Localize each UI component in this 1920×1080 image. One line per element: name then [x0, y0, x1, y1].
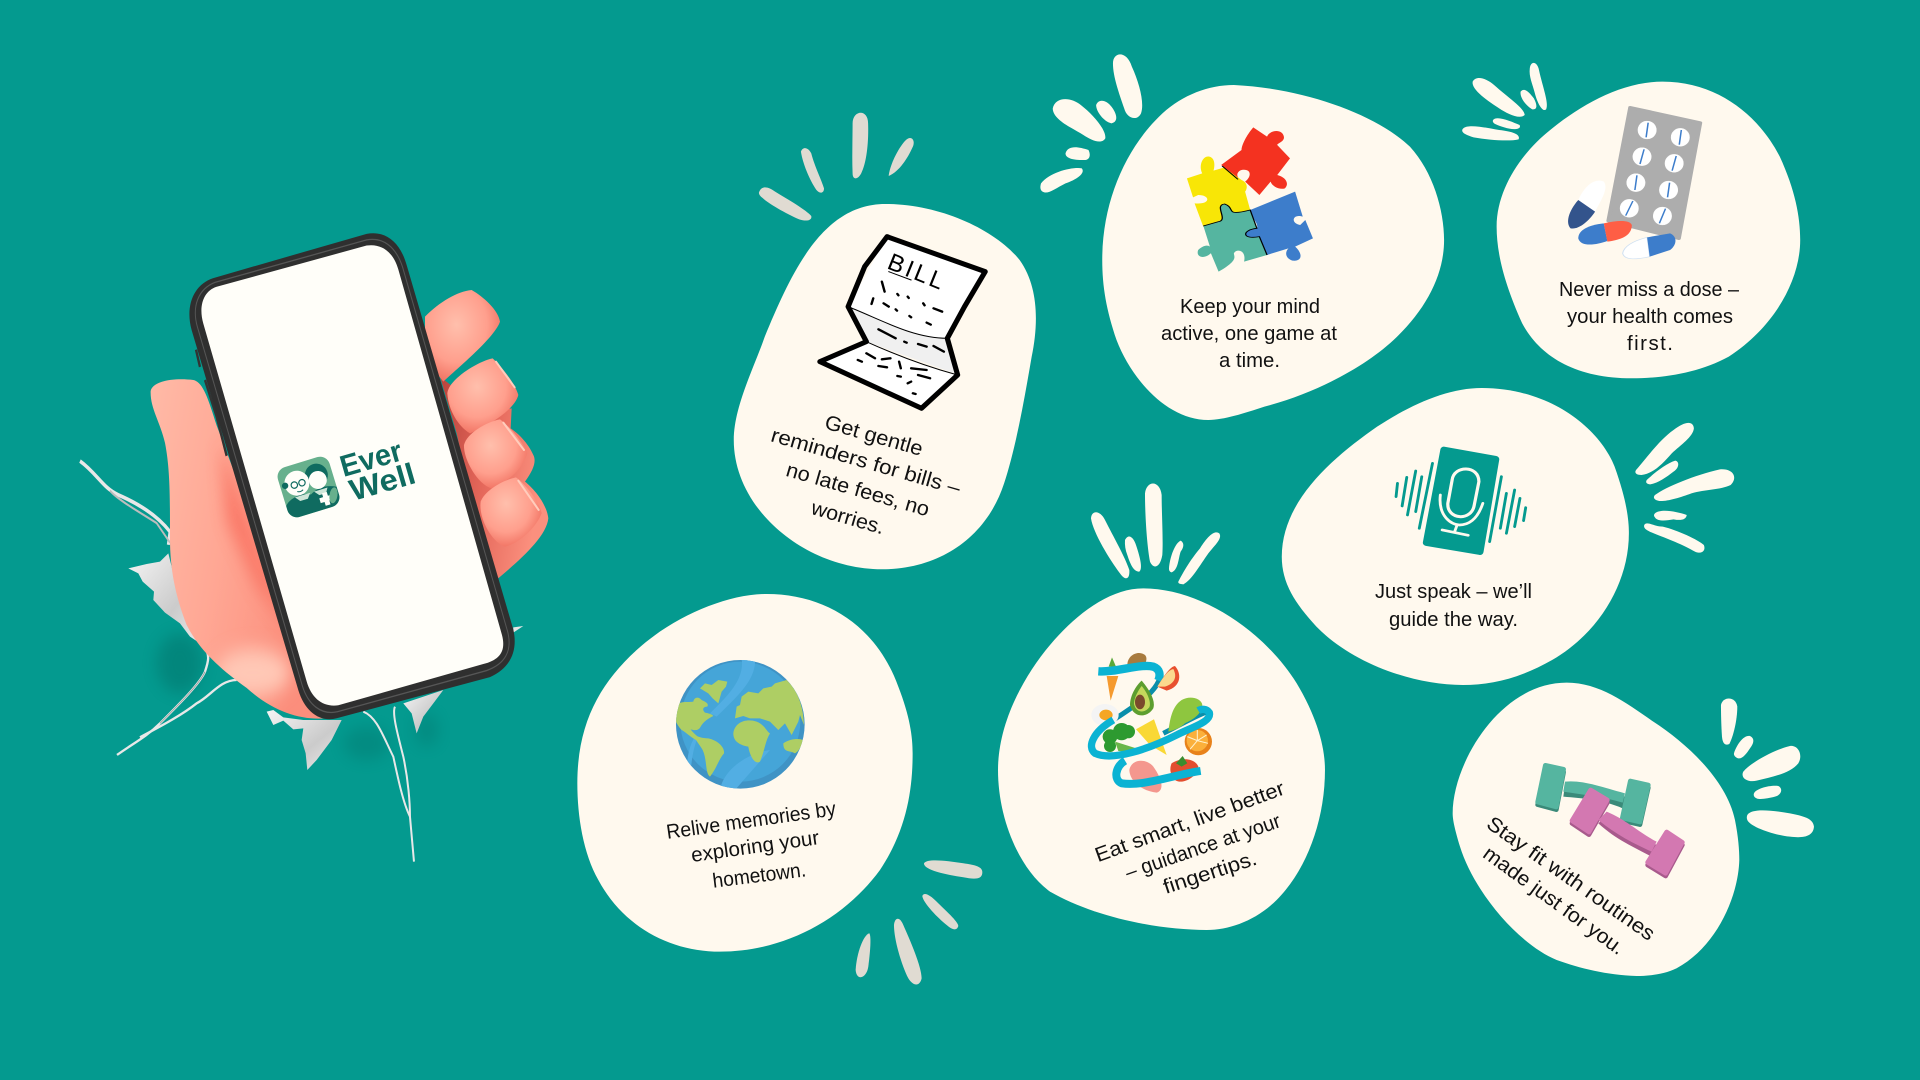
- icon: healthy food with measuring tape: [1091, 653, 1212, 793]
- logo wordmark: Ever: [336, 435, 406, 484]
- text: bills: no late fees, no: [783, 458, 932, 521]
- text: bills: Get gentle: [822, 411, 926, 461]
- rays: mind games: [1040, 54, 1142, 193]
- text: mind games: a time.: [1219, 349, 1280, 372]
- broccoli: [1103, 723, 1135, 752]
- phone in hand illustration: [80, 233, 548, 862]
- panel: bills: [734, 113, 1036, 569]
- rays: hometown memories: [856, 860, 982, 985]
- text: hometown memories: Relive memories by: [665, 797, 838, 844]
- text: voice guidance: Just speak – we’ll: [1375, 580, 1532, 603]
- text: medication: Never miss a dose –: [1559, 278, 1740, 301]
- icon: microphone: [1396, 450, 1526, 552]
- text: nutrition: Eat smart, live better: [1092, 777, 1288, 867]
- text: mind games: Keep your mind: [1180, 295, 1320, 318]
- infographic canvas: [79, 54, 1814, 984]
- panel: hometown memories: [577, 594, 982, 985]
- icon: bill paper: BILL: [884, 249, 948, 295]
- text: medication: [1559, 278, 1740, 355]
- icon: globe: [676, 658, 805, 790]
- text: hometown memories: [665, 797, 838, 893]
- rays: bills: [759, 113, 914, 221]
- bezel highlight: [195, 239, 509, 712]
- rays: medication: [1462, 63, 1547, 140]
- blob: nutrition: [998, 588, 1325, 930]
- egg: [1091, 704, 1119, 726]
- text: voice guidance: [1375, 580, 1532, 631]
- text: mind games: active, one game at: [1161, 322, 1337, 345]
- text: fitness: Stay fit with routines: [1482, 812, 1659, 945]
- text: mind games: [1161, 295, 1337, 372]
- blob: bills: [734, 204, 1036, 569]
- phone: [189, 233, 515, 719]
- text: bills: [768, 411, 964, 539]
- blob: mind games: [1102, 85, 1444, 420]
- blob: hometown memories: [577, 594, 913, 952]
- icon: bill paper: [820, 237, 985, 408]
- panel: nutrition: [998, 484, 1325, 930]
- text: hometown memories: exploring your: [690, 826, 821, 867]
- logo icon: [278, 456, 340, 518]
- carrot: [1107, 676, 1118, 701]
- text: nutrition: – guidance at your: [1122, 809, 1284, 884]
- text: bills: reminders for bills –: [768, 424, 964, 500]
- text: bills: worries.: [808, 496, 887, 539]
- text: fitness: made just for you.: [1479, 842, 1629, 960]
- phone body: [189, 233, 515, 719]
- orange: [1185, 728, 1212, 755]
- bottom tape band: [1116, 761, 1201, 784]
- rays: nutrition: [1091, 484, 1220, 584]
- blob: voice guidance: [1282, 388, 1629, 685]
- panel: medication: [1462, 63, 1800, 378]
- palm and thumb: [151, 379, 327, 719]
- panel: fitness: [1453, 683, 1814, 976]
- phone screen: [201, 245, 503, 706]
- logo wordmark: [336, 435, 419, 508]
- icon: pills: [1568, 107, 1700, 259]
- fingers: [425, 290, 548, 578]
- salmon: [1129, 761, 1161, 793]
- middle tape band: [1091, 709, 1210, 756]
- blob: fitness: [1453, 683, 1739, 976]
- cheese: [1136, 719, 1167, 755]
- logo wordmark: Well: [346, 458, 419, 508]
- text: medication: your health comes: [1567, 305, 1733, 328]
- phone side buttons: [196, 350, 227, 456]
- text: nutrition: fingertips.: [1160, 847, 1260, 899]
- tomato: [1170, 759, 1198, 782]
- back strands of tape: [1113, 670, 1208, 733]
- walnut: [1127, 653, 1146, 667]
- text: voice guidance: guide the way.: [1389, 608, 1518, 631]
- apple: [1157, 666, 1179, 691]
- text: hometown memories: hometown.: [711, 858, 807, 893]
- text: nutrition: [1092, 777, 1288, 899]
- blob: medication: [1497, 82, 1800, 378]
- rays: voice guidance: [1635, 423, 1734, 553]
- torn paper hole: [80, 461, 523, 862]
- logo: EverWell: [278, 444, 416, 518]
- lettuce: [1168, 698, 1202, 732]
- avocado: [1130, 681, 1154, 715]
- icon: puzzle pieces: [1187, 127, 1313, 272]
- rays: fitness: [1721, 698, 1814, 837]
- panel: mind games: [1040, 54, 1444, 420]
- top tape band: [1098, 666, 1160, 681]
- text: medication: first.: [1627, 332, 1673, 355]
- icon: dumbbells: [1538, 765, 1682, 876]
- panel: voice guidance: [1282, 388, 1734, 685]
